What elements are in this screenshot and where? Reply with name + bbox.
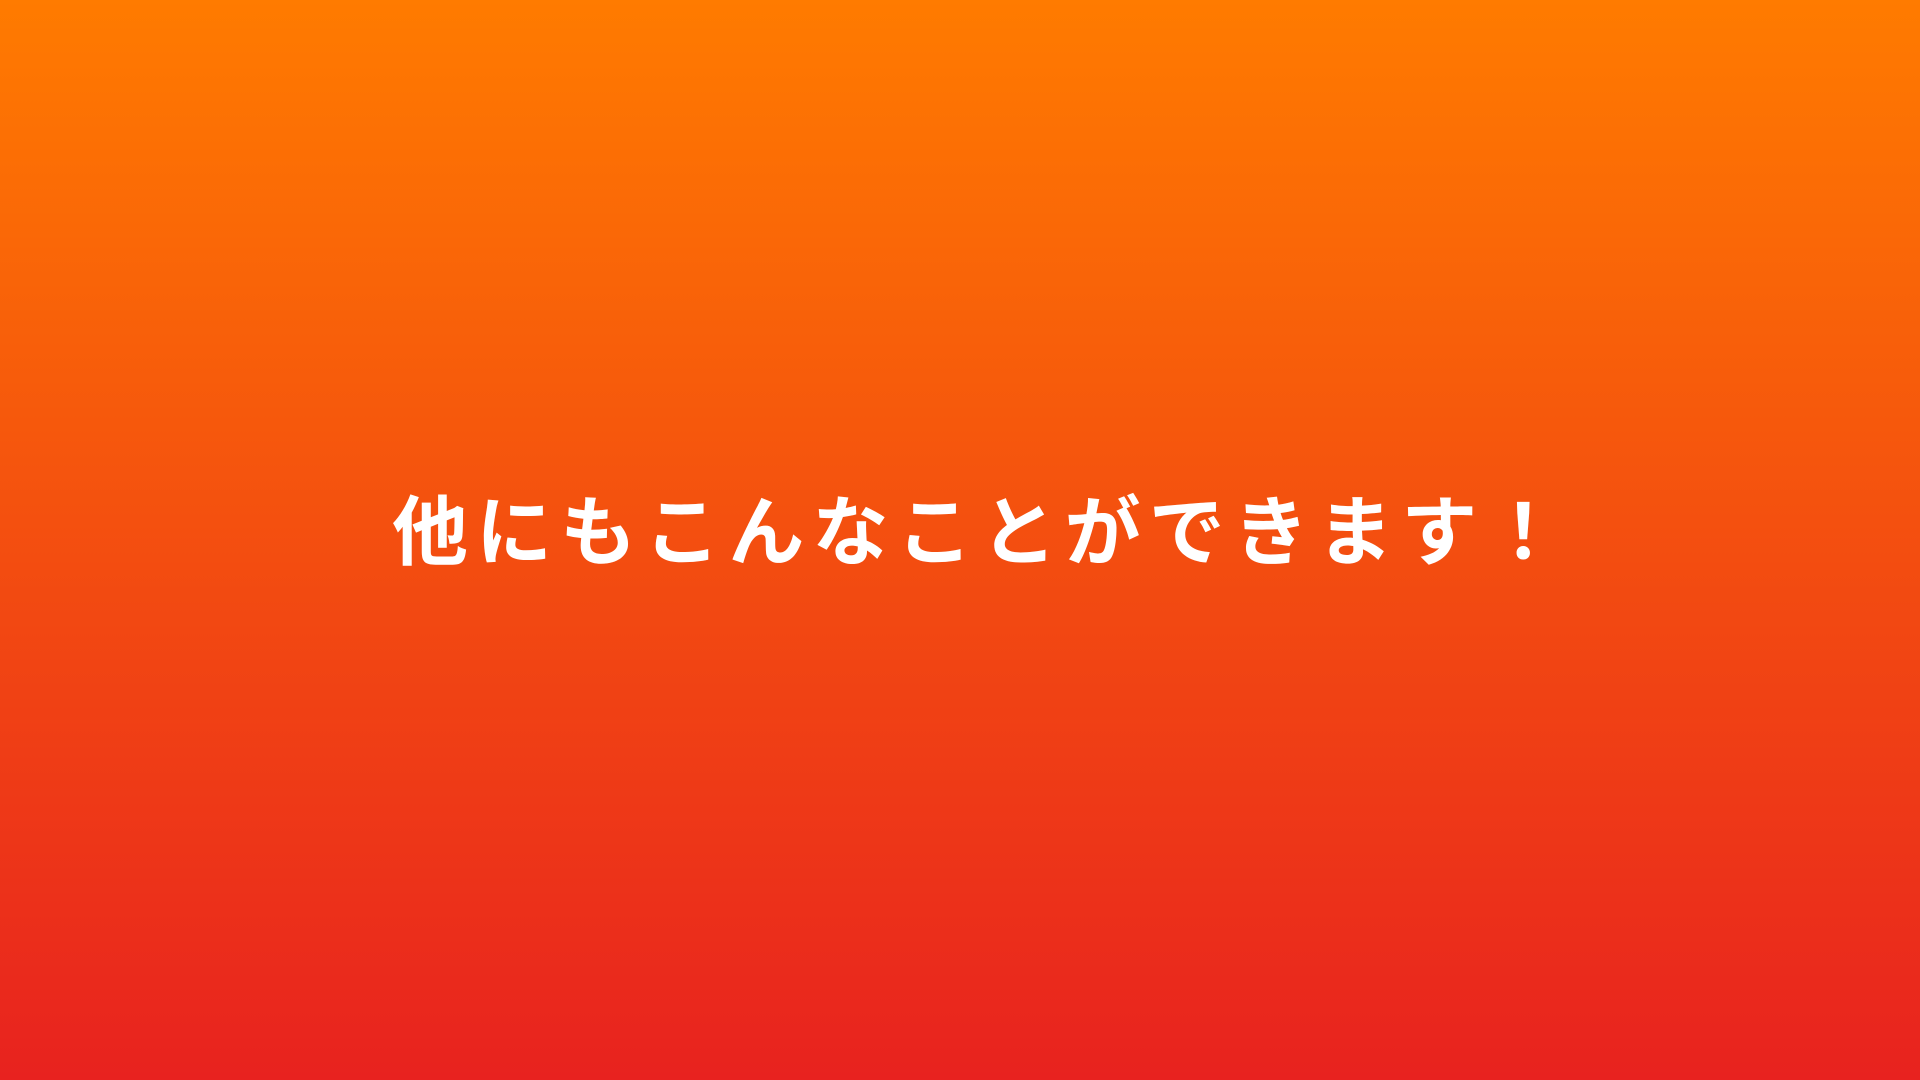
title: 他にもこんなことができます！ [392, 491, 1569, 576]
